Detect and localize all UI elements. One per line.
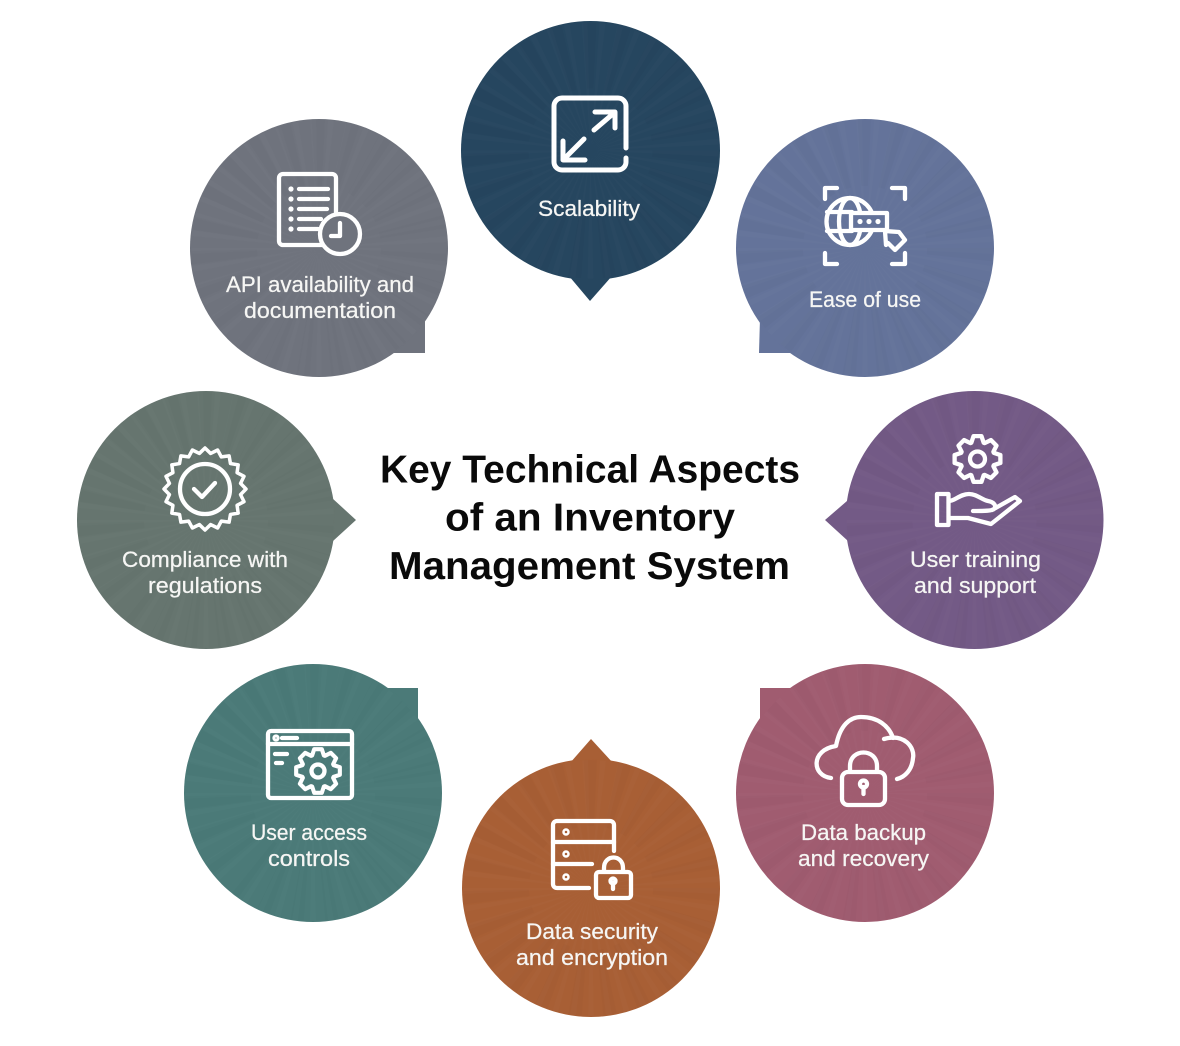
label: API availability and documentation: API availability and [226, 272, 414, 297]
label: API availability and documentation [226, 272, 414, 323]
label: Data security and encryption [516, 919, 668, 970]
title: of an Inventory [445, 496, 735, 540]
label: Ease of use: Ease of use [809, 287, 921, 312]
label: Data backup and recovery [798, 820, 929, 871]
icon: document with clock [279, 174, 360, 254]
panel: Data backup and recovery [736, 664, 994, 922]
label: Compliance with regulations: Compliance with [122, 547, 288, 572]
icon: badge with check mark [164, 448, 246, 530]
title: Key Technical Aspects [380, 448, 800, 492]
panel: Compliance with regulations [77, 391, 356, 649]
icon: globe with cursor [825, 188, 905, 264]
icon: server with padlock [553, 821, 631, 898]
panel: User training and support [825, 391, 1104, 649]
panel: Ease of use [736, 119, 994, 377]
label: Data backup and recovery: and recovery [798, 846, 929, 871]
label: Data security and encryption: Data security [526, 919, 658, 944]
label: User access controls: controls [268, 846, 350, 871]
icon: expand arrows in a square [554, 98, 626, 170]
panel: Scalability [461, 21, 720, 301]
panel: API availability and documentation [190, 119, 448, 377]
icon: browser window with gear [268, 731, 352, 798]
panel: User access controls [184, 664, 442, 922]
panel: Data security and encryption [462, 739, 720, 1017]
label: User training and support: and support [914, 573, 1036, 598]
title [380, 448, 800, 588]
label: User access controls [251, 820, 367, 871]
label: Compliance with regulations: regulations [148, 573, 262, 598]
label: Compliance with regulations [122, 547, 288, 598]
label: API availability and documentation: documentation [244, 298, 396, 323]
label: User training and support [910, 547, 1041, 598]
label: Scalability: Scalability [538, 196, 640, 221]
label: User training and support: User training [910, 547, 1041, 572]
icon: gear above open hand [937, 436, 1020, 525]
title: Management System [389, 545, 790, 588]
label: Data backup and recovery: Data backup [801, 820, 926, 845]
label: User access controls: User access [251, 820, 367, 845]
label: Data security and encryption: and encryption [516, 945, 668, 970]
icon: cloud with padlock [817, 717, 913, 805]
